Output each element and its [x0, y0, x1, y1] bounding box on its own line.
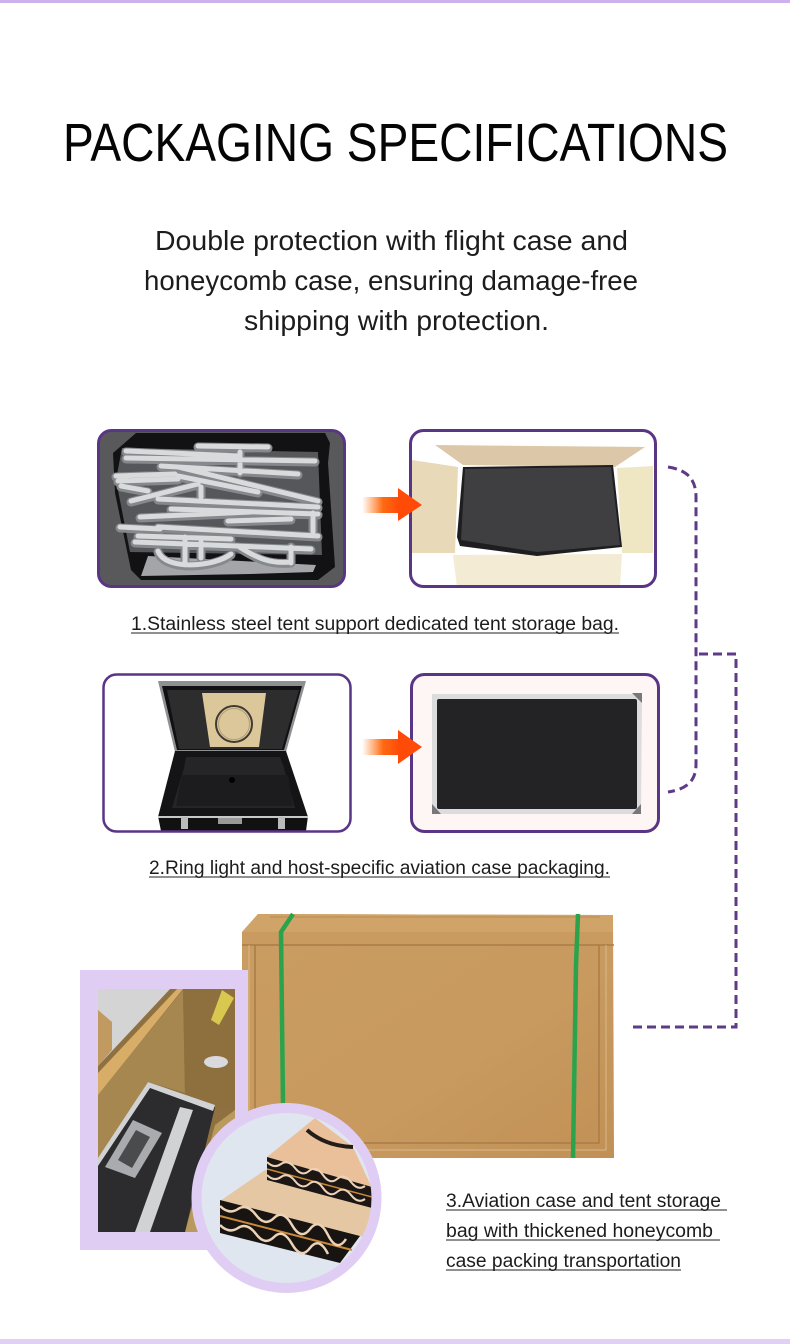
intro text: shipping with protection. — [244, 305, 549, 336]
panel: ring light aviation case — [103, 674, 351, 832]
intro text: honeycomb case, ensuring damage-free — [144, 265, 638, 296]
panel: tent support tubes in bag — [98, 430, 345, 587]
dashed connector brackets — [633, 467, 736, 1027]
caption 2: 2.Ring light and host-specific aviation case packaging. — [149, 858, 610, 879]
panel: host in frame — [412, 674, 658, 832]
caption 3: 3.Aviation case and tent storage — [446, 1191, 721, 1212]
caption 1: 1.Stainless steel tent support dedicated tent storage bag. — [131, 614, 619, 635]
arrow 2 — [362, 730, 422, 764]
top bar — [0, 0, 790, 3]
intro text — [144, 225, 638, 336]
honeycomb carton — [242, 914, 614, 1158]
caption 3 — [446, 1191, 727, 1272]
caption 3: case packing transportation — [446, 1251, 681, 1272]
inset: flight case inside carton — [80, 970, 248, 1250]
panel: bag in carton — [410, 430, 656, 587]
intro text: Double protection with flight case and — [155, 225, 628, 256]
bottom bar — [0, 1339, 790, 1344]
circle: honeycomb cross-section — [192, 1103, 382, 1293]
caption 3: bag with thickened honeycomb — [446, 1221, 713, 1242]
arrow 1 — [362, 488, 422, 521]
